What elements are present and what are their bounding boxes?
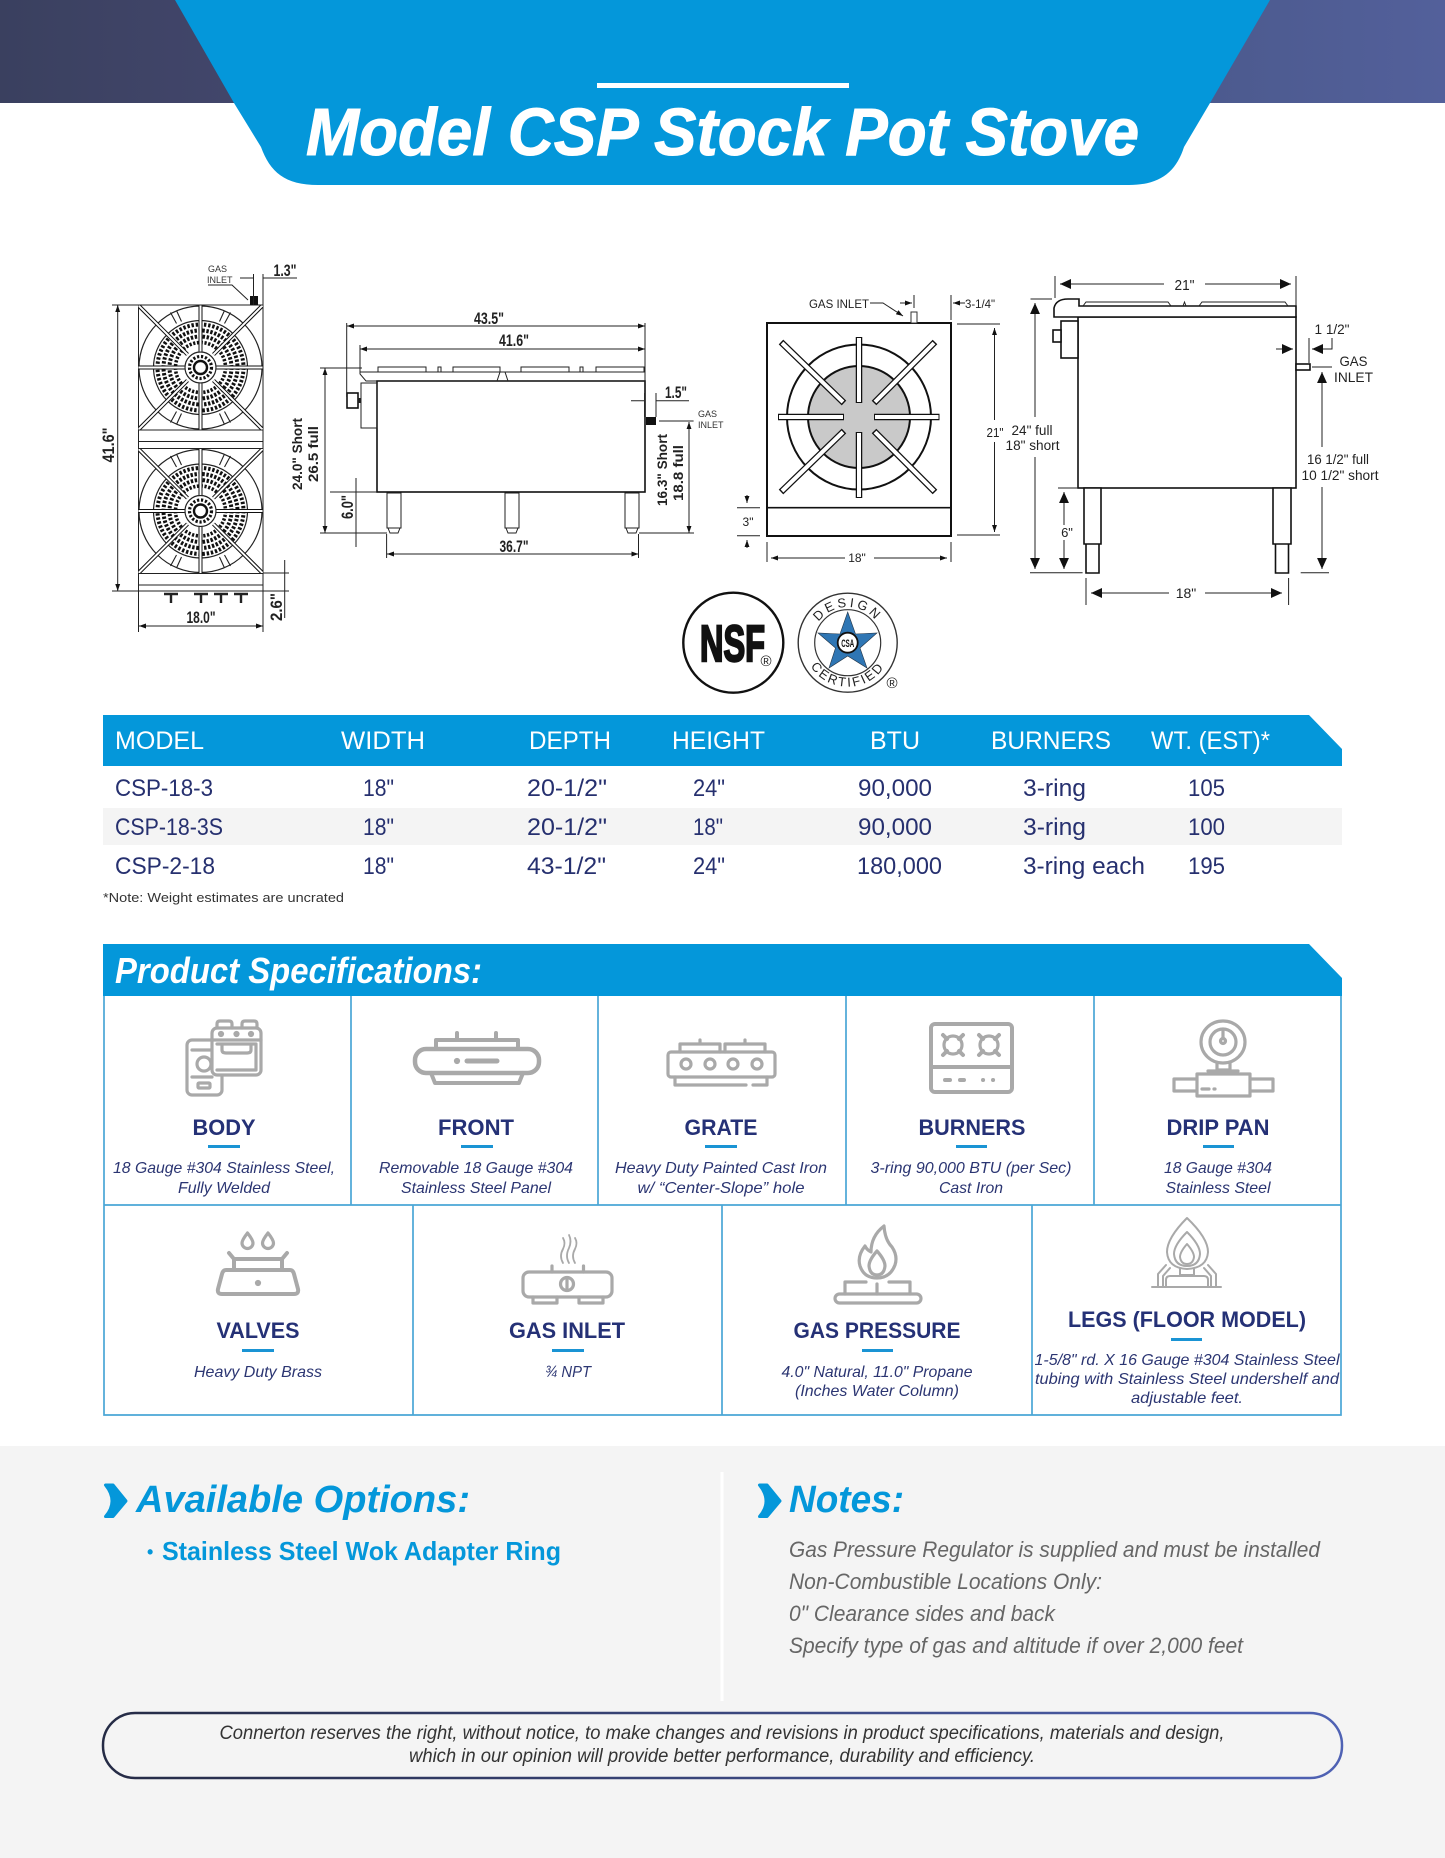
drawing: single burner plan view: 18"	[848, 551, 866, 565]
drawing: top plan view: 41.6"	[99, 428, 118, 462]
drawing: side elevation: 21"	[1174, 277, 1194, 294]
icon: drip pan	[1174, 1021, 1273, 1096]
drawing: single burner plan view	[737, 295, 1004, 565]
table: dimensions: BURNERS	[991, 727, 1111, 755]
panel: notes: 0" Clearance sides and back	[789, 1601, 1056, 1626]
drawing: front elevation: 36.7"	[500, 537, 528, 556]
table: dimensions: 3-ring each	[1023, 853, 1145, 880]
table: dimensions: 20-1/2"	[527, 775, 607, 802]
drawing: front elevation	[289, 309, 724, 558]
table: dimensions: 24"	[693, 853, 725, 880]
disclaimer box	[103, 1713, 1342, 1778]
spec cell: body: 18 Gauge #304 Stainless Steel,	[113, 1160, 335, 1177]
section header: product specifications: Product Specifications:	[115, 950, 482, 991]
drawing: single burner plan view: 21"	[986, 426, 1004, 440]
table: dimensions: CSP-18-3S	[115, 814, 223, 841]
header rule	[597, 83, 849, 88]
spec cell: grate: w/ “Center-Slope” hole	[638, 1180, 805, 1197]
drawing: front elevation: INLET	[698, 420, 724, 430]
table: dimensions: 3-ring	[1023, 814, 1086, 841]
header blue tab	[175, 0, 1270, 185]
header band left	[0, 0, 240, 103]
logo: NSF	[683, 593, 783, 693]
spec cell: gas pressure: 4.0" Natural, 11.0" Propane	[782, 1364, 973, 1381]
drawing: front elevation: 24.0" Short	[289, 418, 305, 490]
disclaimer box: which in our opinion will provide better performance, durability and efficiency.	[409, 1746, 1035, 1767]
section header: product specifications	[103, 944, 1342, 996]
title: Model CSP Stock Pot Stove	[306, 95, 1139, 170]
drawing: top plan view	[99, 261, 297, 632]
spec cell: legs	[1034, 1218, 1340, 1407]
header band right	[1205, 0, 1445, 103]
drawing: side elevation: 6"	[1061, 525, 1073, 540]
drawing: side elevation	[1006, 276, 1379, 605]
icon: burners	[931, 1024, 1012, 1092]
panel: notes: Gas Pressure Regulator is supplied and must be installed	[789, 1537, 1321, 1562]
spec cell: drip pan	[1164, 1021, 1273, 1197]
drawing: front elevation: 18.8 full	[670, 445, 686, 501]
burner 2	[138, 449, 262, 573]
drawing: single burner plan view: 3"	[743, 515, 753, 529]
spec cell: valves: VALVES	[216, 1318, 300, 1343]
panel: notes: Specify type of gas and altitude if over 2,000 feet	[789, 1633, 1244, 1658]
spec cell: drip pan: 18 Gauge #304	[1164, 1160, 1272, 1177]
icon: chevron	[106, 1485, 126, 1516]
spec cell: body: BODY	[192, 1115, 256, 1140]
table footnote: *Note: Weight estimates are uncrated	[103, 890, 344, 905]
icon: gas pressure	[835, 1226, 921, 1303]
table: dimensions: BTU	[870, 727, 920, 755]
drawing: front elevation: 41.6"	[499, 331, 529, 350]
spec cell: valves	[194, 1233, 322, 1381]
drawing: top plan view: 1.3"	[274, 261, 296, 280]
drawing: single burner plan view: GAS INLET	[809, 297, 870, 311]
table: dimensions: WT. (EST)*	[1151, 727, 1270, 755]
table: dimensions	[103, 715, 1342, 880]
panel: notes: Notes:	[789, 1479, 904, 1521]
spec cell: burners: 3-ring 90,000 BTU (per Sec)	[870, 1160, 1072, 1177]
table: dimensions: 180,000	[857, 853, 942, 880]
panel: available options	[106, 1479, 561, 1566]
table: dimensions: 18"	[363, 814, 394, 841]
icon: grate	[668, 1040, 775, 1085]
drawing: top plan view: INLET	[207, 275, 233, 285]
logo: CSA design certified: CERTIFIED	[812, 662, 882, 687]
logo: NSF: NSF	[700, 615, 765, 672]
drawing: front elevation: 16.3" Short	[654, 434, 670, 506]
spec cell: body	[113, 1021, 335, 1197]
spec cell: body: Fully Welded	[178, 1180, 271, 1197]
drawing: side elevation: GAS	[1340, 353, 1368, 369]
table: dimensions: 18"	[363, 853, 394, 880]
spec cell: grate	[615, 1040, 827, 1197]
spec cell: gas pressure: (Inches Water Column)	[795, 1383, 959, 1400]
disclaimer box: Connerton reserves the right, without notice, to make changes and revisions in product specifications, materials and design,	[220, 1723, 1224, 1744]
spec cell: front: Removable 18 Gauge #304	[379, 1160, 573, 1177]
spec grid lines	[104, 996, 1341, 1415]
icon: front	[415, 1033, 539, 1083]
logo: CSA design certified	[798, 592, 898, 693]
drawing: top plan view: 18.0"	[186, 608, 216, 627]
spec cell: gas pressure	[782, 1226, 973, 1400]
panel: available options: •	[147, 1542, 153, 1562]
logo: CSA design certified: ®	[886, 675, 898, 692]
panel: available options: Stainless Steel Wok Adapter Ring	[162, 1536, 561, 1566]
burner 1	[138, 306, 262, 430]
table: dimensions: CSP-2-18	[115, 853, 215, 880]
drawing: side elevation: 1 1/2"	[1314, 321, 1350, 337]
drawing: front elevation: GAS	[698, 409, 717, 419]
spec cell: drip pan: Stainless Steel	[1166, 1180, 1271, 1197]
table: dimensions: 105	[1188, 775, 1225, 802]
table: dimensions: 90,000	[858, 775, 932, 802]
drawing: side elevation: 18" short	[1006, 438, 1060, 453]
table: dimensions: 195	[1188, 853, 1225, 880]
bottom panel divider	[720, 1472, 724, 1701]
drawing: front elevation: 26.5 full	[305, 426, 321, 482]
table: dimensions: 18"	[693, 814, 723, 841]
panel: notes	[760, 1479, 1321, 1658]
panel: notes: Non-Combustible Locations Only:	[789, 1569, 1102, 1594]
table: dimensions: 3-ring	[1023, 775, 1086, 802]
drawing: front elevation: 6.0"	[338, 495, 357, 519]
bottom panel background	[0, 1446, 1445, 1858]
table header bar	[103, 715, 1342, 766]
table: dimensions: DEPTH	[529, 727, 611, 755]
logo: CSA design certified: CSA	[841, 638, 854, 650]
table zebra row	[103, 808, 1342, 845]
drawing: side elevation: 18"	[1176, 585, 1196, 601]
spec cell: legs: adjustable feet.	[1131, 1390, 1243, 1407]
table: dimensions: 20-1/2"	[527, 814, 607, 841]
spec cell: drip pan: DRIP PAN	[1166, 1115, 1270, 1140]
spec cell: gas inlet: ¾ NPT	[545, 1364, 592, 1381]
drawing: front elevation: 1.5"	[665, 383, 687, 402]
icon: gas inlet	[523, 1235, 612, 1303]
spec cell: gas pressure: GAS PRESSURE	[794, 1318, 960, 1343]
spec cell: valves: Heavy Duty Brass	[194, 1364, 322, 1381]
icon: chevron	[760, 1485, 780, 1516]
table: dimensions: CSP-18-3	[115, 775, 213, 802]
spec cell: legs: LEGS (FLOOR MODEL)	[1068, 1307, 1306, 1332]
logo: NSF: ®	[760, 653, 772, 670]
spec cell: front: FRONT	[438, 1115, 515, 1140]
drawing: top plan view: 2.6"	[267, 593, 286, 621]
spec cell: legs: tubing with Stainless Steel undershelf and	[1035, 1371, 1340, 1388]
table: dimensions: 18"	[363, 775, 394, 802]
drawing: single burner plan view: 3-1/4"	[965, 297, 995, 311]
icon: valves	[218, 1233, 298, 1294]
logo: CSA design certified: DESIGN	[812, 598, 880, 621]
panel: available options: Available Options:	[135, 1479, 470, 1521]
drawing: front elevation: 43.5"	[474, 309, 504, 328]
icon: legs	[1152, 1218, 1221, 1287]
spec cell: gas inlet: GAS INLET	[509, 1318, 626, 1343]
spec cell: burners: BURNERS	[918, 1115, 1026, 1140]
spec cell: burners: Cast Iron	[939, 1180, 1003, 1197]
drawing: side elevation: 10 1/2" short	[1302, 467, 1379, 483]
spec cell: legs: 1-5/8" rd. X 16 Gauge #304 Stainless Steel	[1034, 1352, 1340, 1369]
drawing: top plan view: GAS	[208, 264, 227, 274]
table: dimensions: 43-1/2"	[527, 853, 606, 880]
spec cell: front: Stainless Steel Panel	[401, 1180, 551, 1197]
drawing: side elevation: 16 1/2" full	[1307, 451, 1369, 467]
table: dimensions: MODEL	[115, 727, 204, 755]
table: dimensions: WIDTH	[341, 727, 425, 755]
table: dimensions: 24"	[693, 775, 725, 802]
spec cell: gas inlet	[509, 1235, 626, 1381]
icon: body	[187, 1021, 261, 1095]
table: dimensions: 100	[1188, 814, 1225, 841]
spec cell: grate: GRATE	[684, 1115, 758, 1140]
spec cell: front	[379, 1033, 573, 1197]
table: dimensions: 90,000	[858, 814, 932, 841]
drawing: side elevation: 24" full	[1012, 423, 1052, 438]
table: dimensions: HEIGHT	[672, 727, 765, 755]
spec cell: burners	[870, 1024, 1072, 1197]
drawing: side elevation: INLET	[1334, 369, 1373, 385]
spec cell: grate: Heavy Duty Painted Cast Iron	[615, 1160, 827, 1177]
